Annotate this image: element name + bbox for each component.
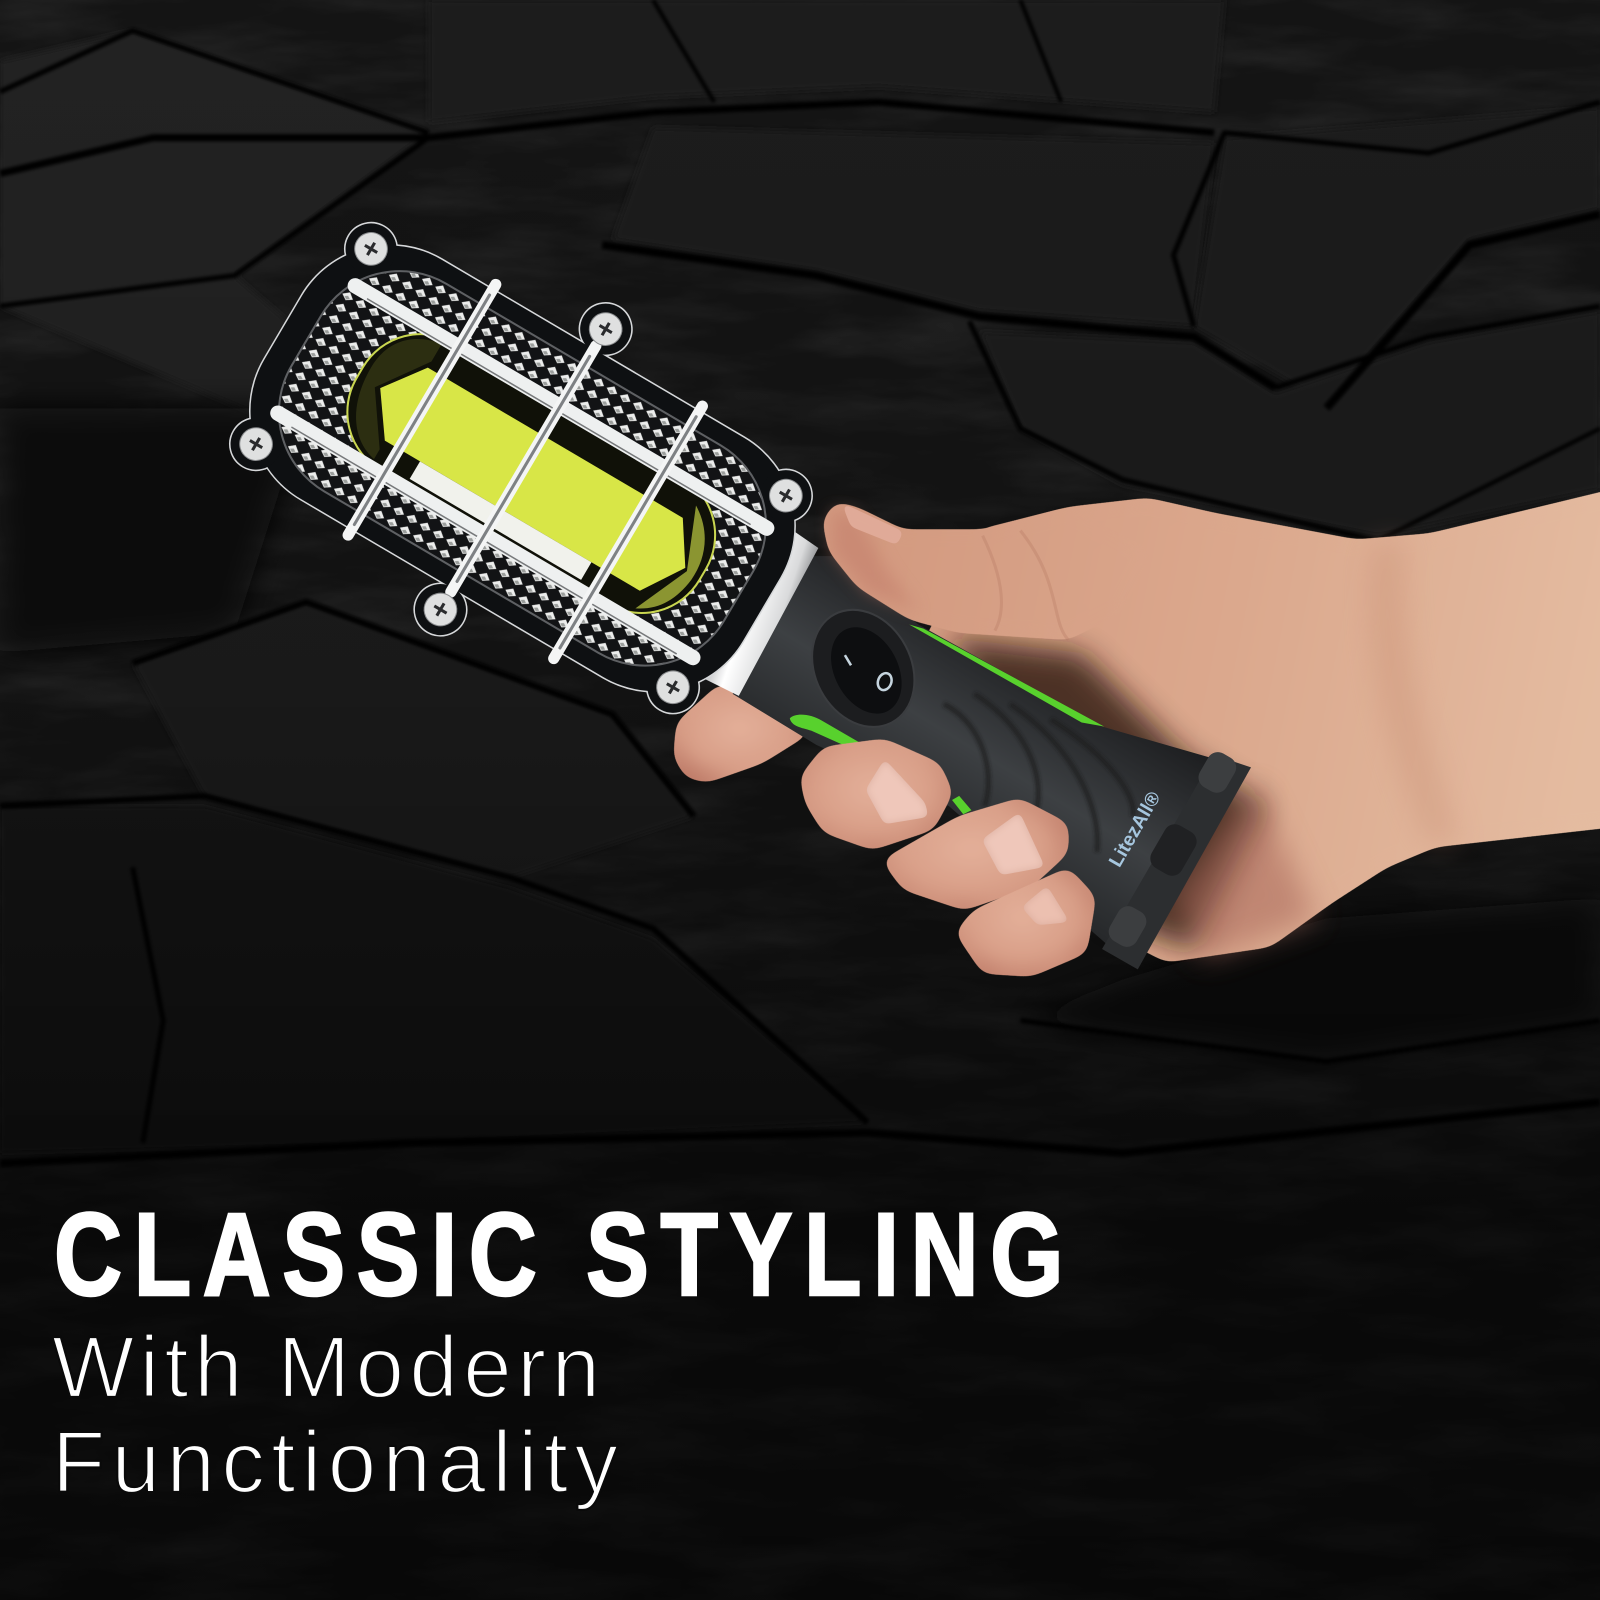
- subtitle: With Modern: [52, 1319, 600, 1416]
- work lamp head: [187, 166, 857, 772]
- subtitle: Functionality: [52, 1414, 618, 1511]
- handle grip grooves: [944, 694, 1133, 852]
- brand label: LitezAll®: [1105, 788, 1165, 871]
- chrome collar: [704, 526, 818, 696]
- green accent strips: [790, 624, 1104, 814]
- flashlight handle: [733, 556, 1251, 969]
- lamp housing: [187, 166, 857, 772]
- white reflection strip: [410, 461, 591, 580]
- dimpled reflector: [245, 237, 800, 700]
- subtitle: [52, 1319, 618, 1511]
- ring finger: [882, 798, 1068, 910]
- index finger behind handle: [673, 684, 811, 783]
- thumb: [822, 502, 1153, 640]
- power switch: [792, 592, 934, 745]
- mounting screws: [209, 183, 835, 754]
- LED recess olive reflections: [332, 319, 730, 629]
- palm shadow around handle: [949, 638, 1265, 949]
- wire cage: [242, 222, 805, 719]
- little finger: [955, 867, 1096, 977]
- COB LED panel: [358, 352, 707, 605]
- middle finger: [800, 739, 953, 850]
- LED recess: [323, 309, 740, 638]
- title: CLASSIC STYLING: [54, 1188, 1064, 1320]
- end flange: [1102, 748, 1251, 969]
- hand: palm, thumb base and forearm: [918, 480, 1600, 962]
